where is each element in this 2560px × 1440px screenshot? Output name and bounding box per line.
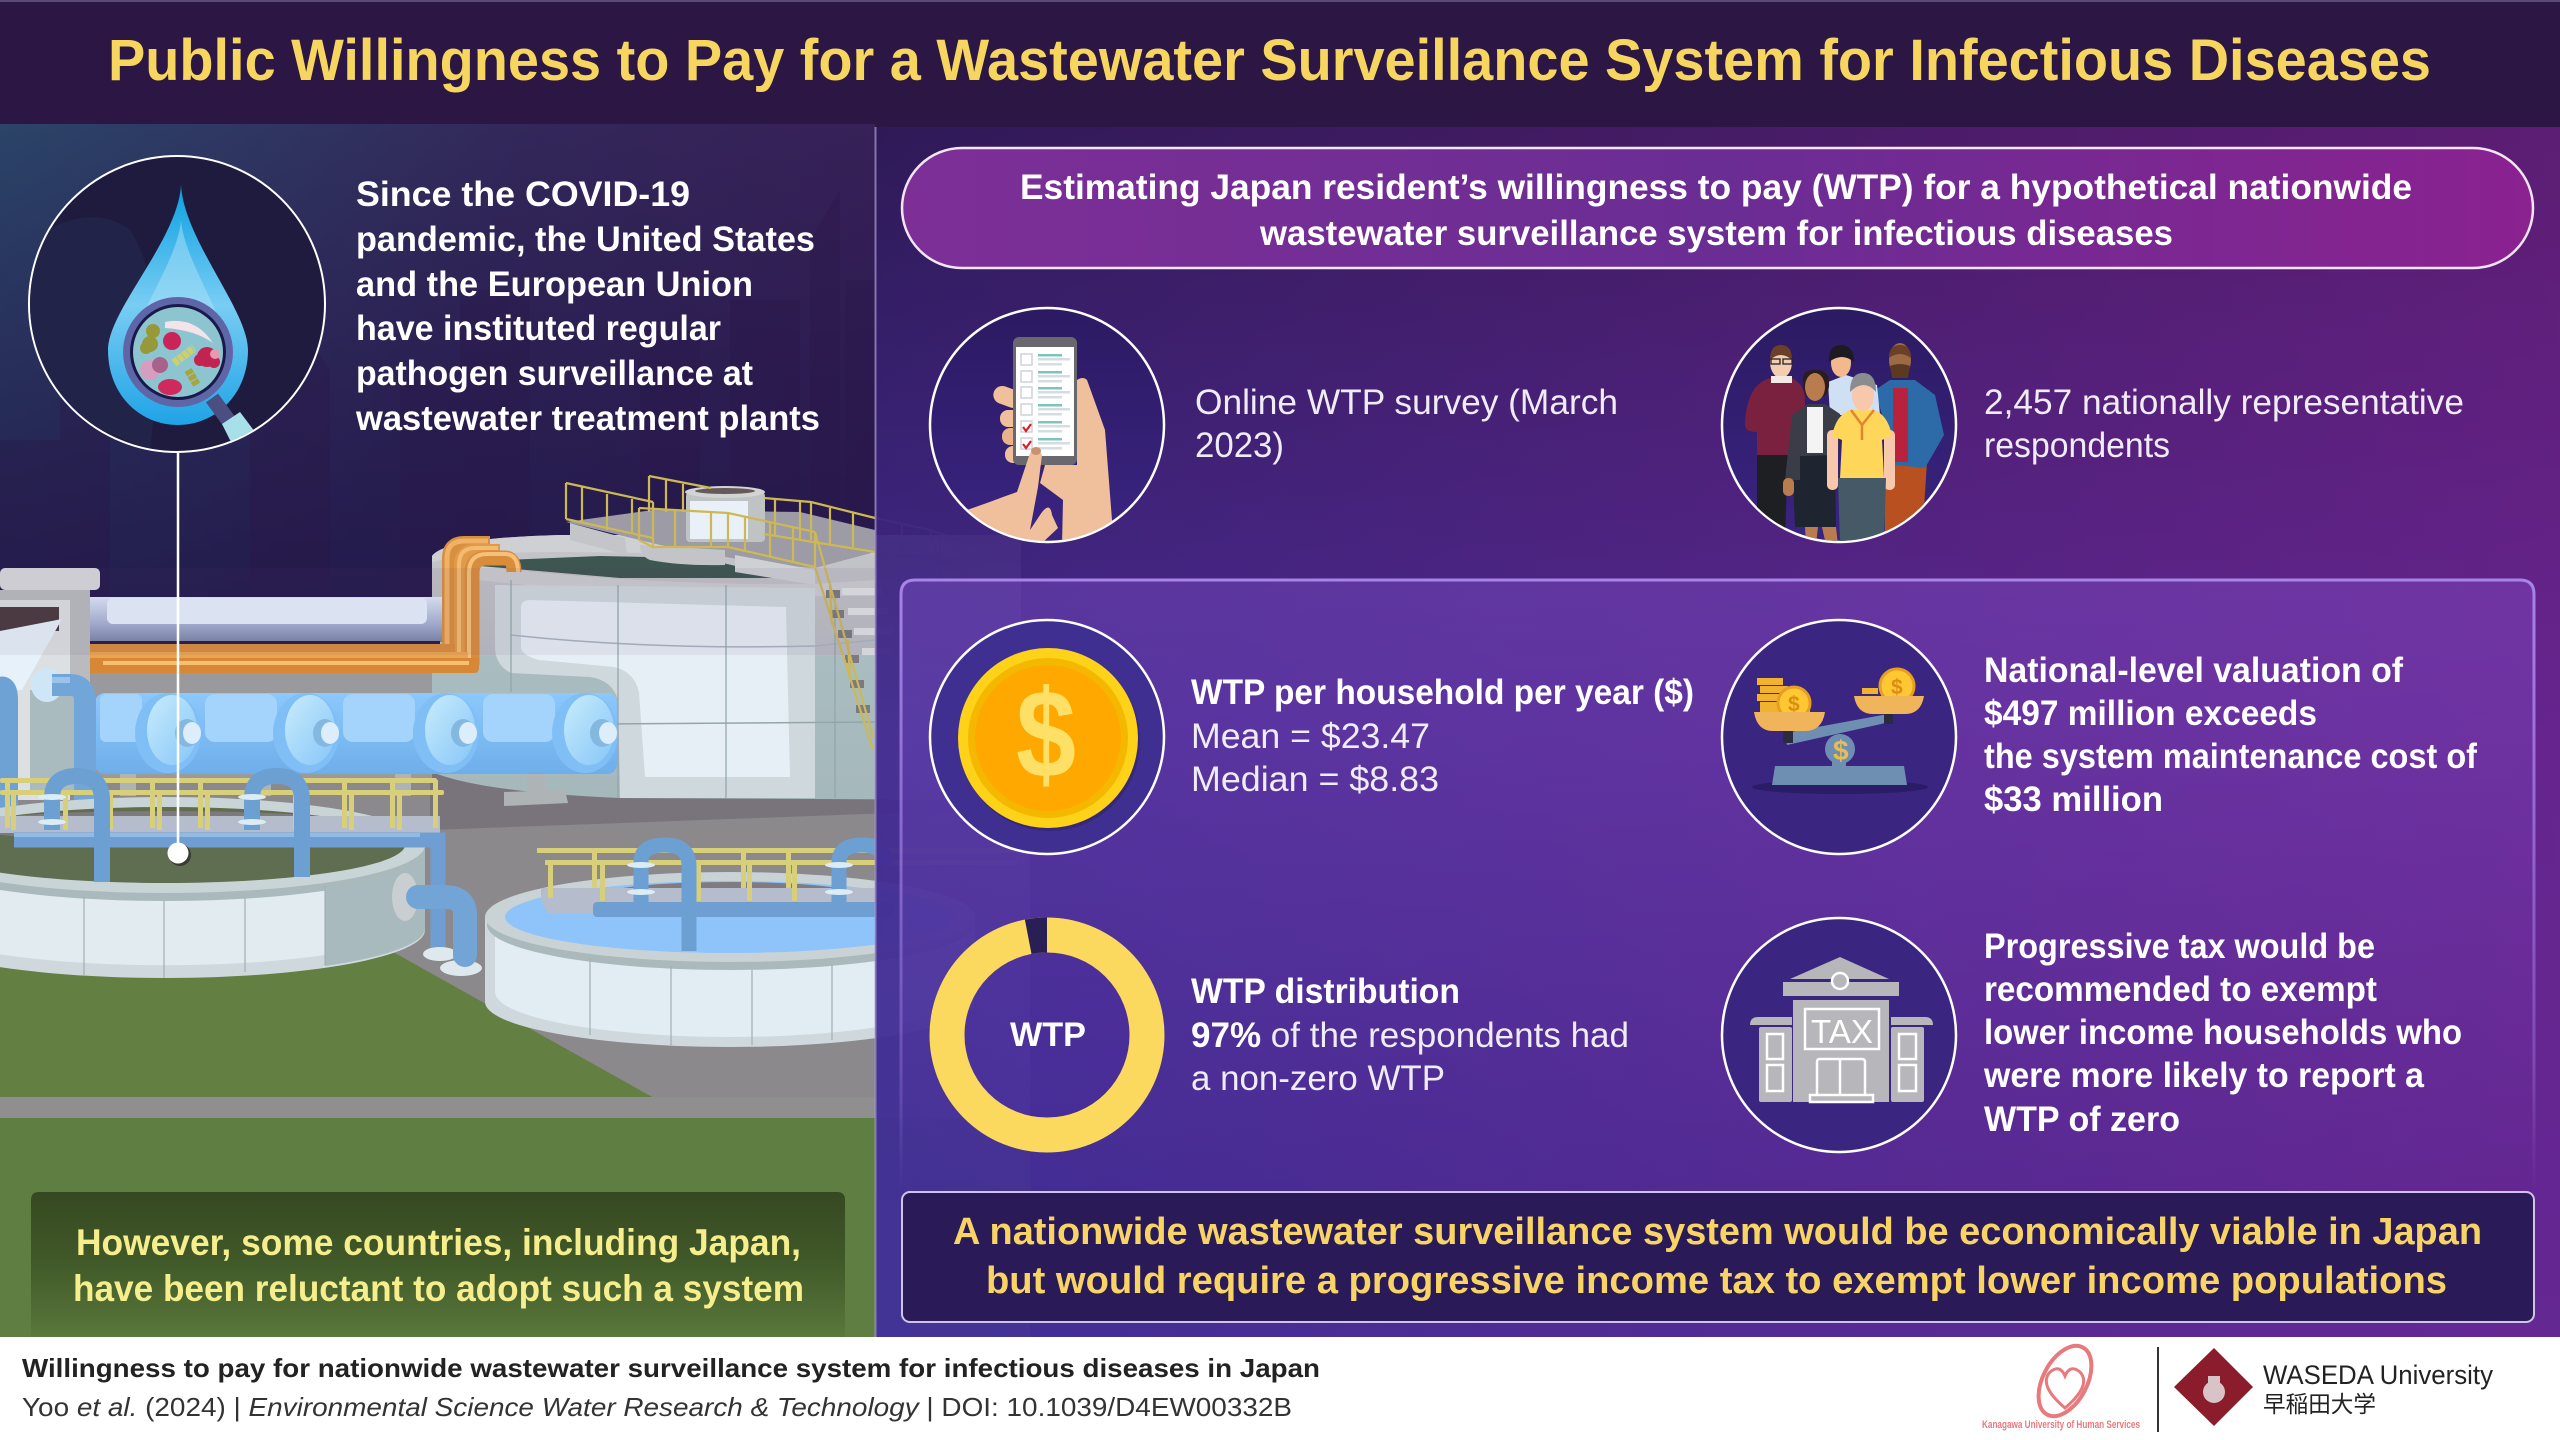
citation details: Yoo et al. (2024) | Environmental Science Water Research & Technology | DOI: 10.1039/D4EW00332B [22,1392,1292,1422]
left building [0,568,100,800]
text: WTP per household: WTP per household per year ($) [1191,673,1694,712]
icon: tax office building [1722,918,1956,1152]
text: survey: 2023) [1195,426,1284,465]
text block: introduction: Since the COVID-19 [356,175,690,214]
lawn and road [0,952,875,1337]
panel: study heading pill: wastewater surveillance system for infectious diseases [1259,214,2173,253]
panel: right background [875,127,2560,1337]
text: progressive tax [1983,927,2462,1139]
stairs [842,588,875,655]
text: respondents: 2,457 nationally representative [1984,383,2464,422]
text block: introduction [355,175,820,438]
text: WTP per household: Median = $8.83 [1191,760,1439,799]
blue drums [95,693,618,806]
chart: WTP distribution donut [947,935,1147,1135]
text: progressive tax: Progressive tax would be [1984,927,2375,966]
logo: Waseda University: 早稲田大学 [2263,1391,2376,1417]
yellow railings [566,476,875,750]
ground [18,783,875,1097]
logo: Waseda University: WASEDA University [2263,1360,2493,1390]
small cylinder [686,492,765,542]
icon: balance scale with coins: $ [1833,735,1849,766]
grey back wall [90,672,432,780]
text: WTP distribution: 97% of the respondents had [1191,1016,1629,1055]
text: progressive tax: lower income households who [1984,1013,2462,1052]
city skyline silhouette [0,190,875,640]
callout: reluctant countries: However, some countries, including Japan, [76,1222,801,1263]
callout: conclusion: A nationwide wastewater surveillance system would be economically viable in Japan [953,1211,2482,1253]
callout: reluctant countries [31,1192,845,1337]
icon: phone survey [930,308,1164,545]
text: WTP distribution: WTP distribution [1191,972,1460,1011]
callout line to the tank [168,453,191,866]
text: WTP per household: Mean = $23.47 [1191,717,1430,756]
icon: balance scale with coins [1722,620,1956,854]
text: national valuation: the system maintenance cost of [1984,737,2477,776]
ghost railing [874,518,875,519]
text block: introduction: pathogen surveillance at [356,354,753,393]
text: survey [1195,383,1618,465]
text: respondents: respondents [1984,426,2170,465]
bridge A with railing and pipes [0,776,482,976]
text block: introduction: and the European Union [356,265,753,304]
upper haze band [0,568,875,655]
horizontal white tube [90,597,442,644]
icon: respondents group [1722,308,1956,545]
clarifier tank B [485,838,875,1047]
text: respondents [1984,383,2464,465]
logo: Kanagawa University of Human Services [1982,1337,2140,1431]
text: WTP distribution: a non-zero WTP [1191,1059,1445,1098]
text block: introduction: pandemic, the United States [356,220,815,259]
chart: WTP distribution donut: WTP [1010,1016,1086,1054]
logo: Waseda University [2174,1348,2493,1426]
text: progressive tax: were more likely to report a [1983,1056,2425,1095]
callout: conclusion [902,1192,2534,1322]
text: national valuation [1984,651,2477,819]
text block: introduction: have instituted regular [356,309,721,348]
text: WTP per household [1191,673,1694,799]
title banner [0,0,2560,124]
text: national valuation: $497 million exceeds [1984,694,2317,733]
panel: study heading pill: Estimating Japan resident’s willingness to pay (WTP) for a hypothetical nationwide [1020,168,2412,207]
text: national valuation: National-level valuation of [1984,651,2403,690]
text: WTP distribution [1191,972,1629,1098]
icon: balance scale with coins: $ [1891,676,1903,699]
text: progressive tax: WTP of zero [1984,1100,2180,1139]
icon: water drop with magnifier [29,156,325,452]
top platform [566,486,875,585]
panel: left scene background [0,124,875,1337]
text: survey: Online WTP survey (March [1195,383,1618,422]
panel: results box [901,580,2534,1190]
callout: reluctant countries: have been reluctant to adopt such a system [73,1268,804,1309]
text: national valuation: $33 million [1984,780,2163,819]
left side blue pipes [0,668,85,812]
title banner: Public Willingness to Pay for a Wastewater Surveillance System for Infectious Diseases [108,28,2431,93]
text: progressive tax: recommended to exempt [1984,970,2377,1009]
panel: study heading pill [902,148,2533,268]
icon: balance scale with coins: $ [1788,693,1800,716]
icon: gold coin [930,620,1164,854]
big rear tank [432,535,1021,800]
citation title: Willingness to pay for nationwide wastewater surveillance system for infectious diseases in Japan [22,1353,1320,1383]
text block: introduction: wastewater treatment plants [355,399,820,438]
icon: gold coin: $ [1016,665,1076,804]
icon: tax office building: TAX [1811,1013,1873,1050]
illustration: wastewater treatment plant [0,476,1030,1337]
footer [0,1337,2560,1440]
orange pipes [90,541,518,673]
callout: conclusion: but would require a progressive income tax to exempt lower income populations [986,1260,2447,1302]
clarifier tank A [0,797,425,978]
logo: Kanagawa University of Human Services: Kanagawa University of Human Services [1982,1419,2140,1431]
